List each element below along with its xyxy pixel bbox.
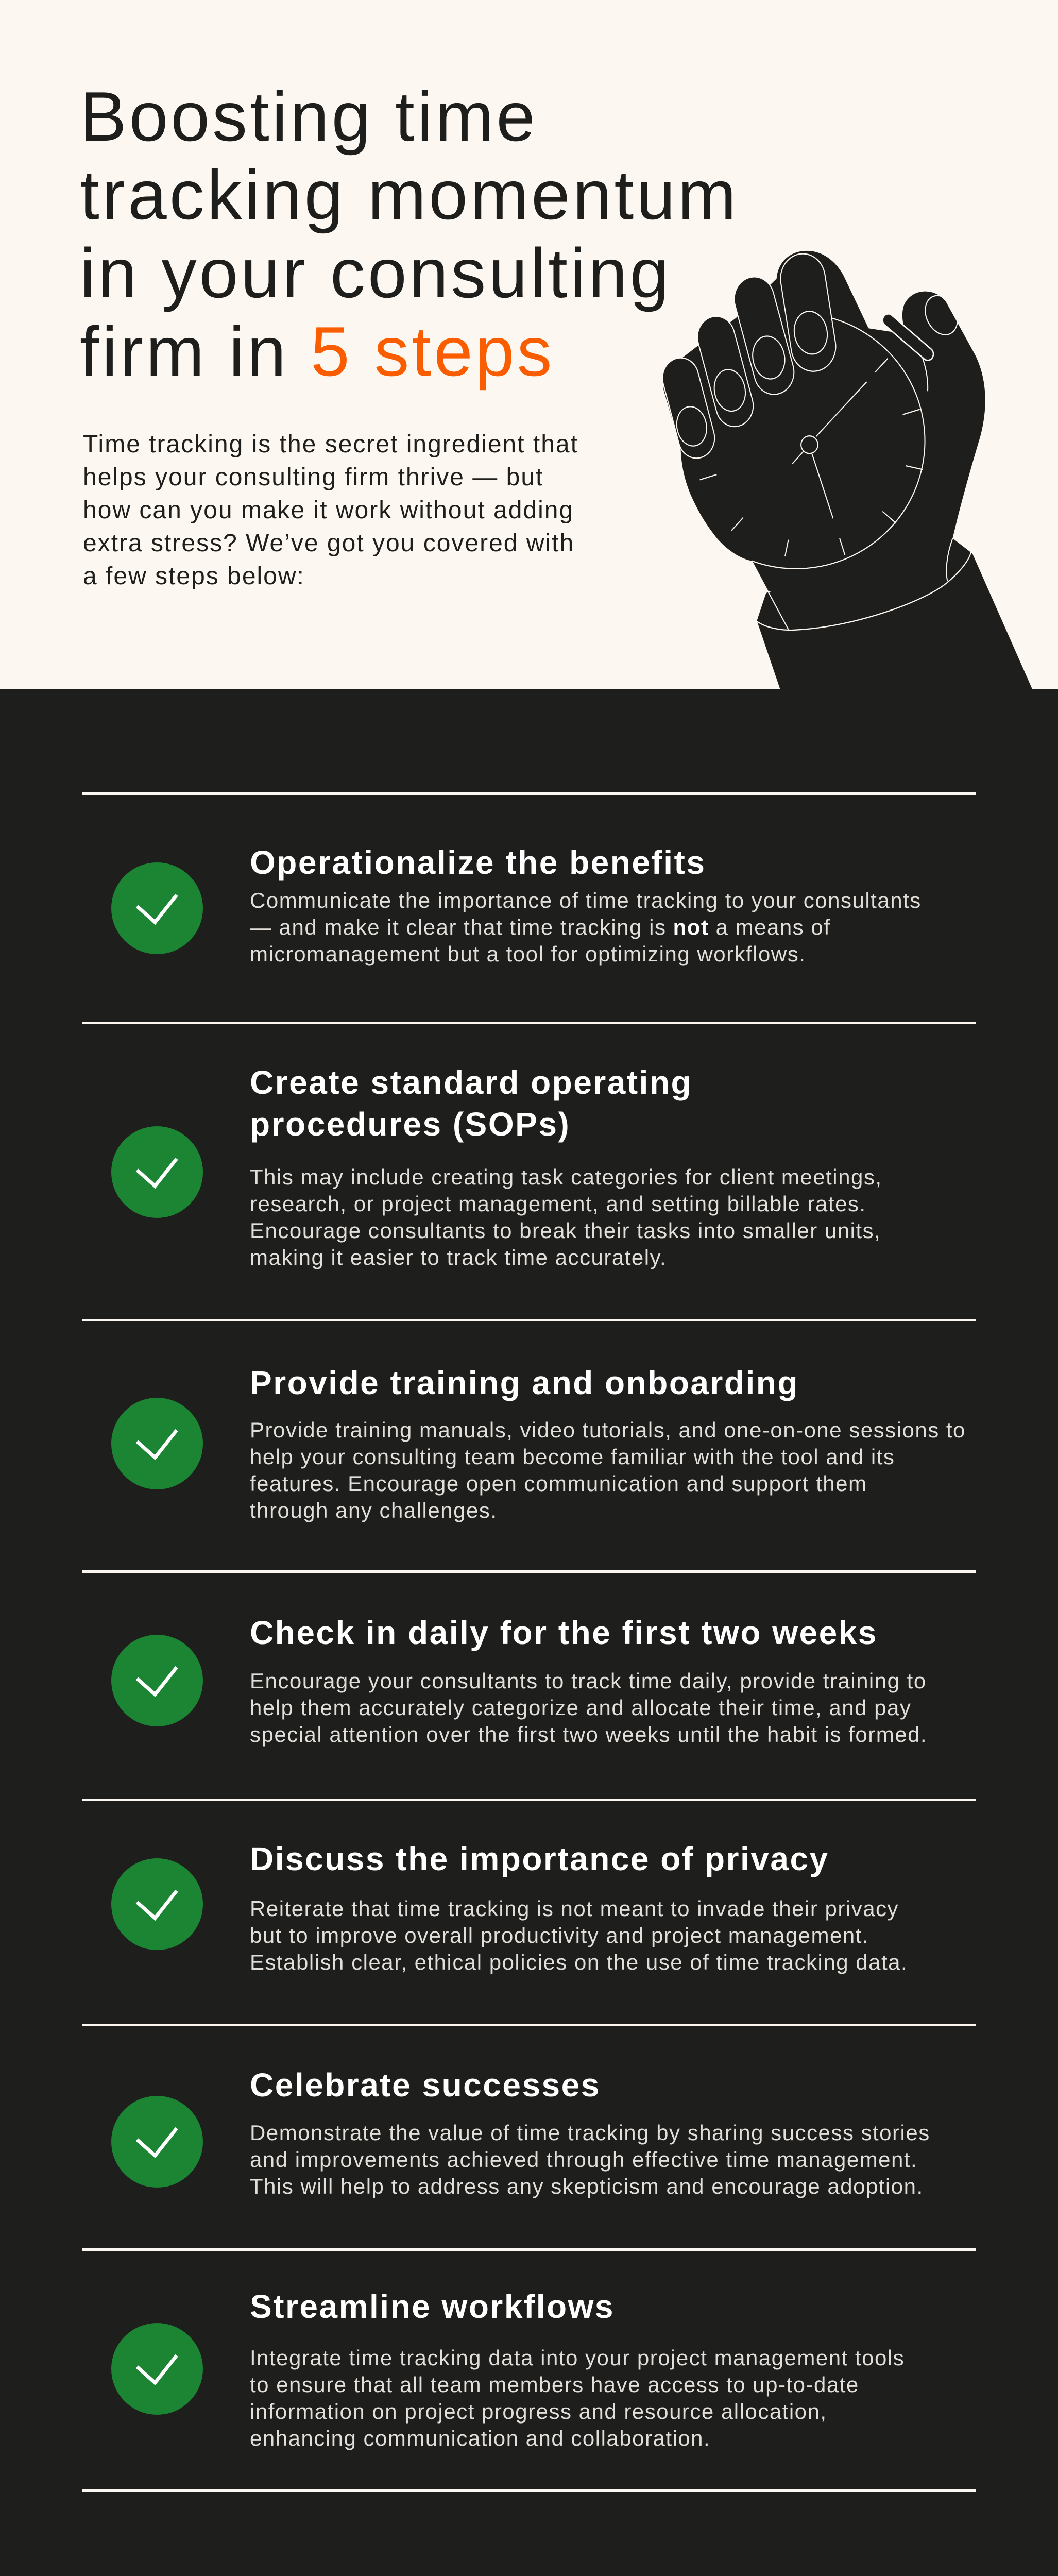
divider lines	[82, 792, 976, 795]
body: research, or project management, and setting billable rates.	[250, 1192, 866, 1216]
body	[250, 2121, 930, 2198]
body: Integrate time tracking data into your project management tools	[250, 2346, 905, 2370]
heading: Check in daily for the first two weeks	[250, 1614, 878, 1651]
icon: check circle	[111, 862, 203, 954]
body: special attention over the first two weeks until the habit is formed.	[250, 1722, 927, 1747]
heading	[250, 1064, 692, 1143]
title: Boosting time	[80, 77, 538, 156]
step 3	[111, 1364, 966, 1522]
body: Encourage your consultants to track time daily, provide training to	[250, 1669, 927, 1693]
step 1	[111, 844, 922, 966]
body: Reiterate that time tracking is not meant to invade their privacy	[250, 1896, 899, 1921]
body: Provide training manuals, video tutorials, and one-on-one sessions to	[250, 1418, 966, 1442]
illustration: hand holding stopwatch	[663, 250, 1032, 689]
body: — and make it clear that time tracking is not a means of	[250, 915, 830, 939]
body: This may include creating task categories for client meetings,	[250, 1165, 882, 1189]
heading: Provide training and onboarding	[250, 1364, 799, 1401]
intro paragraph: extra stress? We’ve got you covered with	[83, 530, 574, 557]
title: tracking momentum	[80, 156, 739, 234]
icon: check circle	[111, 2096, 203, 2188]
body: Establish clear, ethical policies on the use of time tracking data.	[250, 1950, 908, 1974]
step 6	[111, 2066, 930, 2198]
title: firm in 5 steps	[80, 312, 554, 391]
body: and improvements achieved through effective time management.	[250, 2147, 917, 2172]
step 7	[111, 2288, 905, 2450]
icon: check circle	[111, 1398, 203, 1489]
body	[250, 888, 922, 966]
icon: check circle	[111, 1126, 203, 1218]
heading: Operationalize the benefits	[250, 844, 706, 881]
body: but to improve overall productivity and project management.	[250, 1923, 869, 1947]
body: information on project progress and resource allocation,	[250, 2399, 827, 2424]
icon: check circle	[111, 1858, 203, 1950]
heading: Create standard operating	[250, 1064, 692, 1101]
body: help your consulting team become familiar with the tool and its	[250, 1445, 895, 1469]
icon: check circle	[111, 1635, 203, 1726]
intro paragraph: Time tracking is the secret ingredient that	[83, 431, 578, 458]
step 2	[111, 1064, 882, 1269]
body: making it easier to track time accurately.	[250, 1245, 667, 1269]
intro paragraph: a few steps below:	[83, 563, 305, 590]
body: to ensure that all team members have access to up-to-date	[250, 2372, 859, 2397]
body	[250, 1669, 927, 1747]
body: help them accurately categorize and allocate their time, and pay	[250, 1696, 911, 1720]
dark steps panel	[0, 689, 1058, 2576]
body: This will help to address any skepticism and encourage adoption.	[250, 2174, 924, 2198]
body	[250, 2346, 905, 2450]
intro paragraph: how can you make it work without adding	[83, 497, 574, 524]
body: Encourage consultants to break their tasks into smaller units,	[250, 1218, 881, 1243]
body: enhancing communication and collaboration.	[250, 2426, 710, 2450]
body: Communicate the importance of time tracking to your consultants	[250, 888, 922, 912]
body	[250, 1418, 966, 1522]
body	[250, 1165, 882, 1269]
heading: Discuss the importance of privacy	[250, 1840, 829, 1877]
icon: check circle	[111, 2323, 203, 2415]
intro paragraph	[83, 431, 578, 590]
body	[250, 1896, 908, 1974]
title	[80, 77, 739, 391]
body: Demonstrate the value of time tracking by sharing success stories	[250, 2121, 930, 2145]
title: in your consulting	[80, 234, 671, 312]
body: through any challenges.	[250, 1498, 497, 1522]
step 5	[111, 1840, 908, 1974]
intro paragraph: helps your consulting firm thrive — but	[83, 464, 543, 491]
heading: procedures (SOPs)	[250, 1106, 570, 1143]
step 4	[111, 1614, 927, 1747]
heading: Streamline workflows	[250, 2288, 615, 2325]
heading: Celebrate successes	[250, 2066, 601, 2104]
body: micromanagement but a tool for optimizing workflows.	[250, 942, 806, 966]
body: features. Encourage open communication and support them	[250, 1471, 867, 1496]
